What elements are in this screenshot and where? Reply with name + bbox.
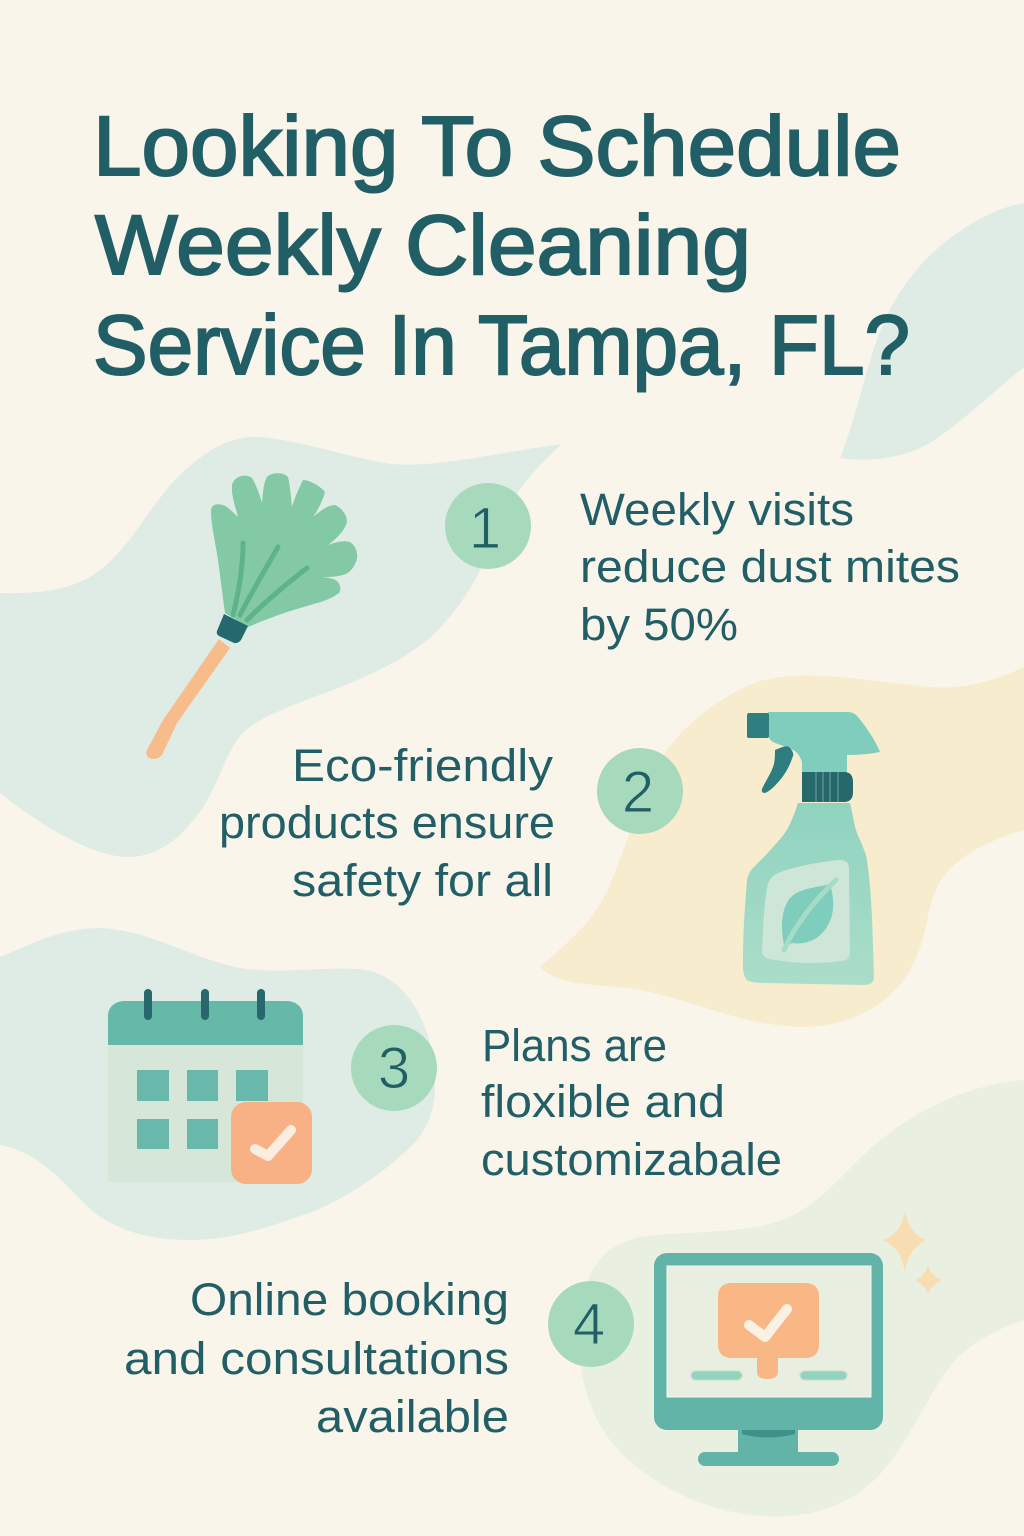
text block 4 <box>124 1274 509 1442</box>
blob: duster background <box>0 437 562 857</box>
badge 4: 4 <box>573 1292 605 1357</box>
badge 1: 1 <box>469 496 501 561</box>
text block 2: Eco-friendly <box>292 740 554 791</box>
icon: sparkles <box>883 1211 942 1294</box>
text block 1 <box>580 484 960 650</box>
blob: calendar background <box>0 928 435 1240</box>
text block 4: Online booking <box>190 1274 509 1325</box>
text block 2: products ensure <box>219 797 555 848</box>
blob: top right <box>840 203 1024 460</box>
badge 2: 2 <box>622 760 654 825</box>
icon: spray bottle <box>743 712 880 985</box>
title: Weekly Cleaning <box>95 198 751 292</box>
text block 4: and consultations <box>124 1333 509 1384</box>
text block 3: floxible and <box>481 1076 725 1127</box>
blob: monitor background <box>579 1080 1024 1517</box>
icon: calendar <box>108 993 312 1184</box>
text block 4: available <box>316 1391 509 1442</box>
badge 4 <box>548 1281 634 1367</box>
icon: feather duster <box>146 473 357 759</box>
text block 3: Plans are <box>482 1020 667 1071</box>
badge 2 <box>597 748 683 834</box>
title: Service In Tampa, FL? <box>93 298 910 392</box>
icon: monitor <box>654 1253 883 1466</box>
title <box>93 99 910 392</box>
text block 2: safety for all <box>292 855 553 906</box>
text block 2 <box>219 740 555 906</box>
text block 1: reduce dust mites <box>580 541 960 592</box>
text block 1: by 50% <box>580 599 738 650</box>
text block 3: customizabale <box>481 1134 782 1185</box>
badge 3 <box>351 1025 437 1111</box>
blob: spray background <box>540 667 1024 1027</box>
title: Looking To Schedule <box>93 99 901 193</box>
text block 3 <box>481 1020 782 1185</box>
text block 1: Weekly visits <box>580 484 854 535</box>
badge 1 <box>445 483 531 569</box>
badge 3: 3 <box>378 1036 410 1101</box>
